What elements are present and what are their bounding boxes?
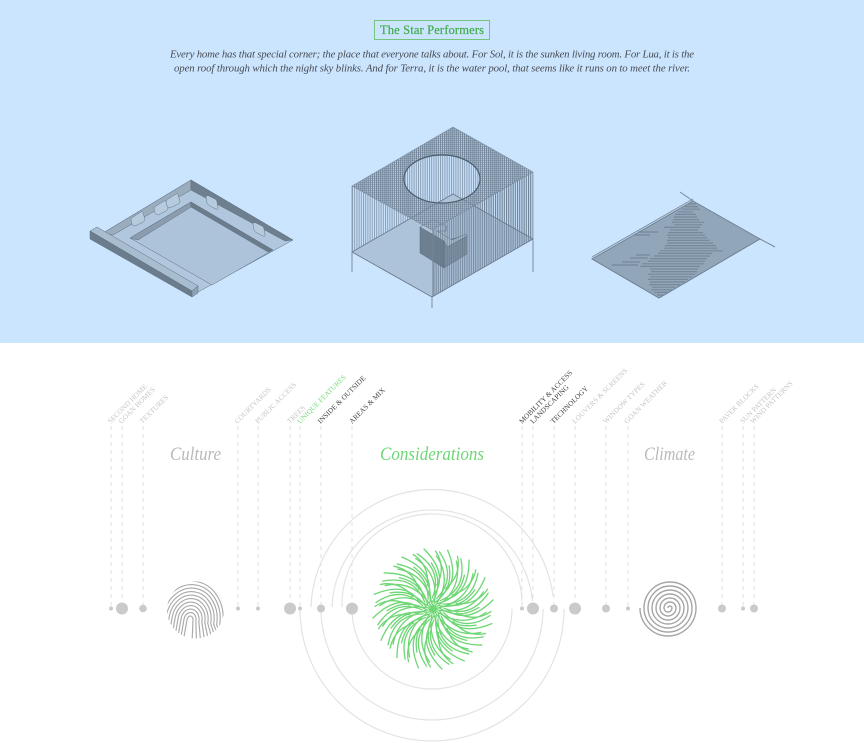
icon: spiral — [640, 582, 696, 636]
intro text — [169, 48, 694, 74]
labels: considerations: UNIQUE FEATURES — [296, 373, 348, 425]
windows — [131, 194, 265, 236]
concentric arcs — [300, 490, 564, 741]
top panel background — [0, 0, 864, 343]
labels: considerations: INSIDE & OUTSIDE — [316, 374, 368, 425]
icon: green swirl — [373, 549, 493, 669]
labels: considerations: LANDSCAPING — [529, 383, 571, 425]
front right wall — [432, 172, 533, 297]
labels: climate — [571, 367, 795, 425]
labels: culture: SECOND HOME — [106, 382, 149, 425]
intro text: open roof through which the night sky blinks. And for Terra, it is the water pool, that seems like it runs on to meet the river. — [174, 62, 690, 74]
guide lines — [111, 426, 754, 606]
skylight — [404, 155, 480, 203]
intro text: Every home has that special corner; the place that everyone talks about. For Sol, it is the sunken living room. For Lua, it is the — [169, 48, 694, 60]
heading: considerations: Considerations — [380, 444, 484, 465]
labels: considerations: AREAS & MIX — [348, 386, 387, 425]
labels: culture — [106, 381, 307, 425]
labels: culture: COURTYARDS — [233, 386, 273, 425]
illustration: open roof pavilion — [352, 127, 533, 308]
illustration: sunken living room — [90, 180, 293, 297]
labels: considerations — [296, 369, 591, 425]
water stripes — [612, 204, 723, 295]
labels: culture: TEXTURES — [138, 393, 170, 425]
labels: climate: WIND PATTERNS — [749, 380, 795, 425]
labels: considerations: MOBILITY & ACCESS — [518, 369, 574, 425]
labels: culture: TREES — [286, 404, 307, 425]
labels: culture: GOAN HOMES — [117, 386, 157, 425]
labels: climate: LOUVERS & SCREENS — [571, 367, 629, 425]
floor — [352, 194, 533, 297]
labels: climate: PAVER BLOCKS — [718, 382, 761, 425]
timeline dots — [109, 602, 758, 614]
central block — [420, 220, 467, 268]
legs — [352, 239, 533, 308]
title — [374, 20, 490, 40]
labels: climate: SUN PATTERN — [739, 386, 779, 425]
heading: climate: Climate — [644, 444, 695, 465]
illustration: water pool — [592, 192, 775, 298]
icon: fingerprint — [167, 582, 224, 638]
roof — [352, 127, 533, 230]
labels: climate: GOAN WEATHER — [623, 379, 669, 425]
labels: culture: PUBLIC ACCESS — [254, 381, 298, 425]
back walls — [352, 127, 453, 252]
heading: culture: Culture — [170, 444, 221, 465]
beam — [90, 227, 198, 291]
title: The Star Performers — [380, 23, 484, 37]
labels: climate: WINDOW TYPES — [602, 380, 647, 425]
labels: considerations: TECHNOLOGY — [549, 384, 591, 425]
